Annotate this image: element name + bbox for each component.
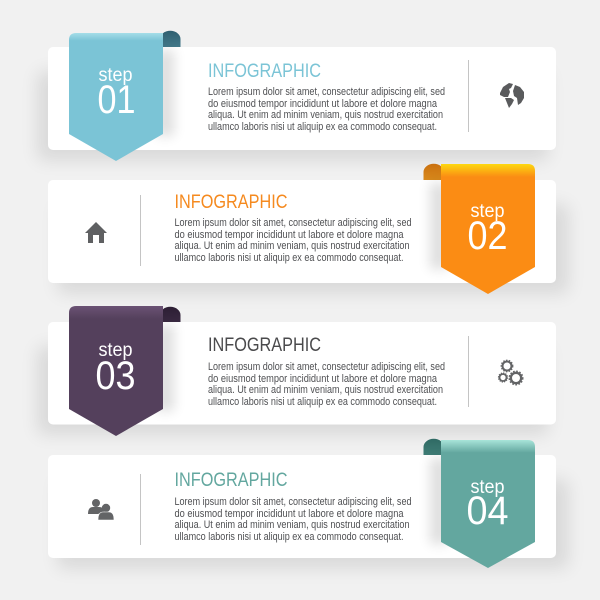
step label 3: step xyxy=(98,339,133,361)
step label 2: step xyxy=(470,200,505,222)
card 1 xyxy=(48,47,556,150)
heading 2: INFOGRAPHIC xyxy=(174,191,288,213)
body text 3: aliqua. Ut enim ad minim veniam, quis nostrud exercitation xyxy=(208,384,443,396)
card 3 xyxy=(48,322,556,424)
panel: step 1 xyxy=(38,31,556,161)
panel: step 4 xyxy=(48,439,568,568)
body text 1: do eiusmod tempor incididunt ut labore et dolore magna xyxy=(208,98,437,110)
body text 4: do eiusmod tempor incididunt ut labore et dolore magna xyxy=(174,508,404,520)
card 2 xyxy=(48,180,556,283)
ribbon fold 3 xyxy=(160,307,180,322)
body text 2 xyxy=(174,217,412,264)
ribbon shadow 4 xyxy=(430,458,448,544)
ribbon 3 xyxy=(69,306,163,436)
step label 1: step xyxy=(98,64,133,86)
step number 1: 01 xyxy=(98,78,136,122)
ribbon 1 xyxy=(69,33,163,161)
icon: gears xyxy=(498,360,523,385)
heading 1: INFOGRAPHIC xyxy=(208,60,321,82)
body text 4 xyxy=(174,496,412,543)
card shadow 3 xyxy=(38,347,548,434)
icon: home xyxy=(85,222,107,243)
body text 2: Lorem ipsum dolor sit amet, consectetur adipiscing elit, sed xyxy=(174,217,412,229)
heading 4: INFOGRAPHIC xyxy=(174,469,288,491)
heading 3: INFOGRAPHIC xyxy=(208,334,321,356)
step number 4: 04 xyxy=(466,489,508,533)
panel: step 2 xyxy=(48,164,568,294)
body text 1: aliqua. Ut enim ad minim veniam, quis nostrud exercitation xyxy=(208,109,443,121)
body text 1 xyxy=(208,86,445,133)
card shadow 1 xyxy=(38,72,548,160)
panel: step 3 xyxy=(38,306,556,436)
icon: globe xyxy=(500,82,524,108)
body text 3: ullamco laboris nisi ut aliquip ex ea commodo consequat. xyxy=(208,396,437,408)
body text 3: do eiusmod tempor incididunt ut labore et dolore magna xyxy=(208,373,437,385)
body text 2: aliqua. Ut enim ad minim veniam, quis nostrud exercitation xyxy=(174,240,410,252)
body text 4: ullamco laboris nisi ut aliquip ex ea commodo consequat. xyxy=(174,531,404,543)
ribbon shadow 1 xyxy=(156,50,174,136)
ribbon 4 xyxy=(441,440,535,568)
step label 4: step xyxy=(470,476,505,498)
ribbon fold 4 xyxy=(424,439,444,455)
ribbon fold 2 xyxy=(424,164,444,180)
ribbon shadow 2 xyxy=(430,183,448,269)
body text 4: aliqua. Ut enim ad minim veniam, quis nostrud exercitation xyxy=(174,519,410,531)
icon: people xyxy=(88,499,114,520)
body text 1: ullamco laboris nisi ut aliquip ex ea commodo consequat. xyxy=(208,121,437,133)
ribbon shadow 3 xyxy=(156,325,174,411)
body text 2: do eiusmod tempor incididunt ut labore et dolore magna xyxy=(174,229,404,241)
body text 3 xyxy=(208,361,445,408)
step number 2: 02 xyxy=(468,214,508,258)
step number 3: 03 xyxy=(96,354,136,398)
card shadow 4 xyxy=(58,480,568,568)
ribbon 2 xyxy=(441,164,535,294)
card shadow 2 xyxy=(58,205,568,293)
body text 3: Lorem ipsum dolor sit amet, consectetur adipiscing elit, sed xyxy=(208,361,445,373)
body text 1: Lorem ipsum dolor sit amet, consectetur adipiscing elit, sed xyxy=(208,86,445,98)
card 4 xyxy=(48,455,556,558)
body text 4: Lorem ipsum dolor sit amet, consectetur adipiscing elit, sed xyxy=(174,496,412,508)
body text 2: ullamco laboris nisi ut aliquip ex ea commodo consequat. xyxy=(174,252,404,264)
ribbon fold 1 xyxy=(160,31,180,47)
